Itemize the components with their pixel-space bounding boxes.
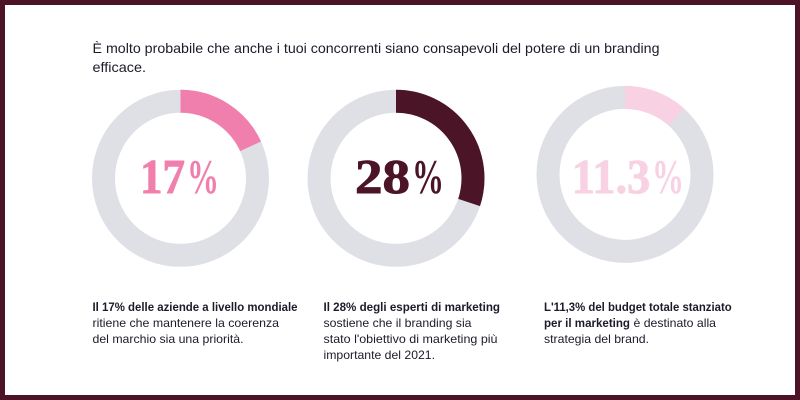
caption: 17%: ritiene che mantenere la coerenza [92, 316, 279, 330]
caption: 11.3%: per il marketing [544, 316, 630, 330]
donut chart: 17% [104, 101, 258, 255]
heading: È molto probabile che anche i tuoi concorrenti siano consapevoli del potere di un branding [92, 40, 660, 56]
heading [92, 40, 660, 75]
caption: 11.3%: strategia del brand. [544, 332, 649, 346]
heading: efficace. [92, 59, 146, 75]
caption: 28%: Il 28% degli esperti di marketing [324, 300, 500, 314]
caption: 17%: Il 17% delle aziende a livello mondiale [92, 300, 298, 314]
caption: 28% [324, 300, 500, 362]
caption: 17%: del marchio sia una priorità. [92, 332, 243, 346]
caption: 11.3% [544, 300, 732, 346]
donut chart: 17%: % [187, 149, 219, 204]
donut chart: 17%: 17 [140, 149, 185, 204]
donut chart: 28% [319, 101, 473, 255]
donut chart: 28%: 28 [355, 149, 410, 204]
caption: 28%: importante del 2021. [324, 348, 435, 362]
donut chart: 11.3% [548, 97, 702, 251]
caption: 28%: stato l'obiettivo di marketing più [324, 332, 498, 346]
caption: 17% [92, 300, 298, 346]
caption: 28%: sostiene che il branding sia [324, 316, 472, 330]
donut chart: 11.3%: 11.3 [572, 149, 650, 204]
donut chart: 28%: % [412, 149, 444, 204]
caption: 11.3%: L'11,3% del budget totale stanziato [544, 300, 732, 314]
caption: 11.3%: è destinato alla [634, 316, 716, 330]
donut chart: 11.3%: % [652, 149, 684, 204]
